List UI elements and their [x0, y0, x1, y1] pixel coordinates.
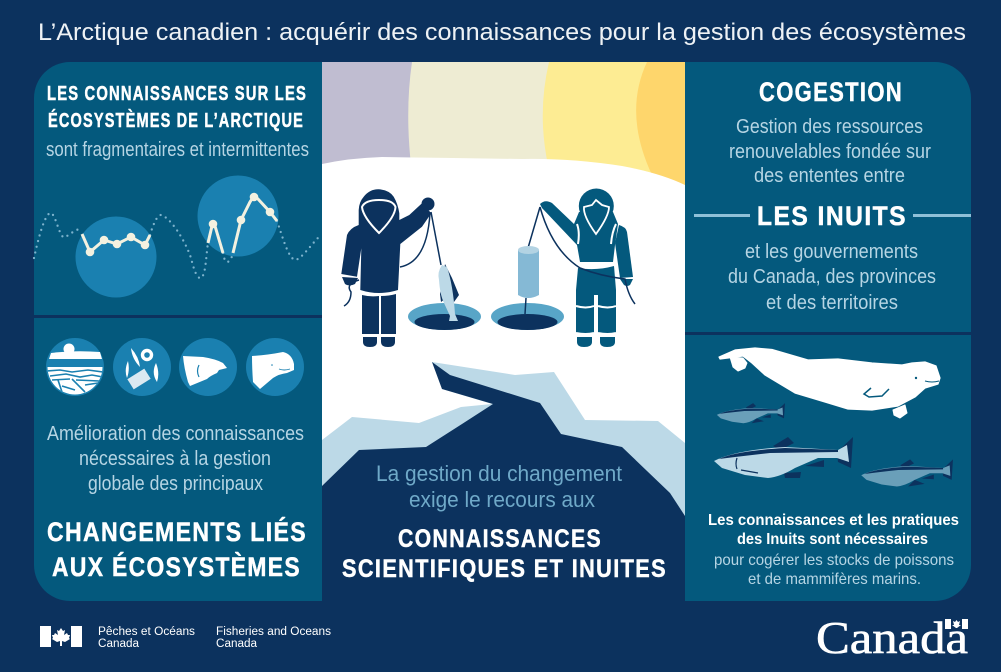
text: governments: et les gouvernements — [745, 241, 918, 263]
ice field — [322, 157, 685, 443]
sky bands — [322, 62, 685, 187]
heading: ecosystem changes: AUX ÉCOSYSTÈMES — [52, 551, 301, 582]
heading: scientific and Inuit knowledge — [342, 525, 667, 583]
text: governments: du Canada, des provinces — [728, 266, 936, 288]
text: department signature: Pêches et Océans — [98, 626, 195, 638]
text: department signature: Canada — [216, 638, 258, 650]
icon: small fish top — [717, 403, 785, 423]
text: improving knowledge: Amélioration des connaissances — [47, 423, 304, 445]
heading: ecosystem changes: CHANGEMENTS LIÉS — [47, 516, 307, 547]
icon: Inuit scientist with sensor — [528, 188, 635, 347]
logo: Government of Canada flag — [40, 626, 82, 647]
text: Inuit knowledge needed: et de mammifères marins. — [748, 571, 921, 588]
text: co-management heading: Gestion des ressources — [736, 116, 923, 138]
icon: sampling tools — [113, 338, 171, 396]
heading: scientific and Inuit knowledge: CONNAISSANCES — [398, 525, 602, 553]
heading: the Inuit — [694, 201, 971, 231]
panel: knowledge heading — [46, 83, 309, 161]
icon: sensor cylinder — [518, 246, 539, 314]
text: managing change — [376, 461, 622, 512]
main rounded panel — [34, 62, 971, 601]
panel: centre scene — [322, 62, 685, 516]
ice holes — [408, 303, 564, 330]
text: governments — [728, 241, 936, 314]
text: co-management heading: COGESTION — [759, 77, 903, 107]
icon: large salmon — [714, 437, 853, 478]
heading: ecosystem changes — [47, 516, 307, 582]
text: department signature: Fisheries and Oceans — [216, 626, 331, 638]
text: improving knowledge: globale des principaux — [88, 473, 263, 495]
dark water — [322, 362, 685, 601]
panel: knowledge heading: sont fragmentaires et intermittentes — [46, 139, 309, 161]
text: managing change: exige le recours aux — [409, 487, 595, 512]
text: co-management heading: renouvelables fondée sur — [729, 141, 931, 163]
panel: knowledge heading: LES CONNAISSANCES SUR LES — [47, 83, 307, 105]
icon: beluga head — [246, 338, 304, 396]
icon: fish head — [179, 338, 237, 396]
text: Inuit knowledge needed: Les connaissances et les pratiques — [708, 512, 959, 529]
icon: sea ice — [46, 338, 104, 396]
text: department signature — [98, 626, 331, 650]
text: governments: et des territoires — [766, 292, 898, 314]
text: managing change: La gestion du changement — [376, 461, 622, 486]
text: improving knowledge: nécessaires à la gestion — [79, 448, 271, 470]
icon: small fish bottom — [861, 459, 953, 486]
text: department signature: Canada — [98, 638, 140, 650]
logo: Canada wordmark: Canada — [816, 613, 968, 663]
icon: caught fish — [438, 264, 459, 321]
heading: the Inuit: LES INUITS — [757, 201, 907, 231]
text: co-management heading — [729, 77, 931, 187]
ice crack — [322, 362, 685, 516]
title: L’Arctique canadien : acquérir des connaissances pour la gestion des écosystèmes — [38, 19, 966, 46]
text: improving knowledge — [47, 423, 304, 495]
icon: Inuit fisher with fish — [341, 189, 441, 347]
text: Inuit knowledge needed — [708, 512, 959, 588]
text: Inuit knowledge needed: des Inuits sont nécessaires — [737, 531, 928, 548]
heading: scientific and Inuit knowledge: SCIENTIFIQUES ET INUITES — [342, 555, 667, 583]
icon: beluga whale — [719, 348, 940, 418]
text: Inuit knowledge needed: pour cogérer les stocks de poissons — [714, 552, 954, 569]
panel: knowledge heading: ÉCOSYSTÈMES DE L’ARCTIQUE — [48, 109, 304, 132]
chart: intermittent data line — [34, 176, 321, 298]
text: co-management heading: des ententes entre — [754, 165, 905, 187]
